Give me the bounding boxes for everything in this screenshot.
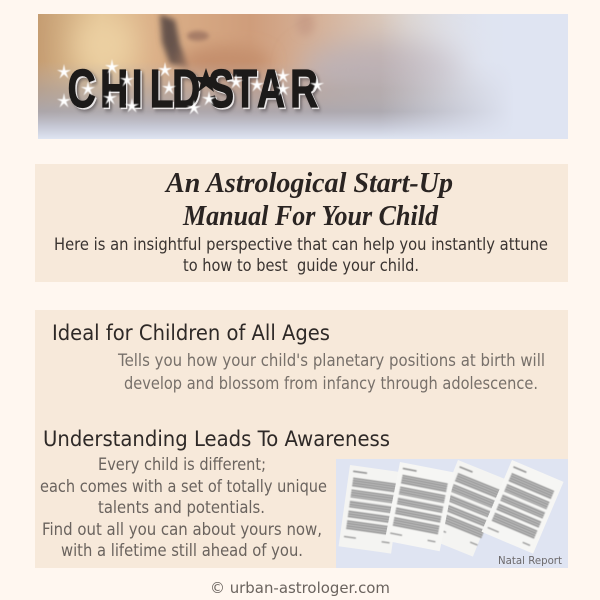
title: An Astrological Start-Up xyxy=(164,168,453,199)
logo wordmark: CHILDSTAR xyxy=(68,58,318,118)
text: planetary positions xyxy=(117,351,545,394)
heading: understanding: Understanding Leads To Awareness xyxy=(43,427,390,451)
banner image: Child Star logo xyxy=(38,12,568,139)
title: Manual For Your Child xyxy=(182,201,439,232)
intro text xyxy=(54,235,548,276)
panel: intro xyxy=(35,164,568,282)
text: every child is different: with a lifetime still ahead of you. xyxy=(61,541,303,560)
image: natal report pages xyxy=(336,459,568,568)
logo wordmark: CHILDSTAR xyxy=(69,59,320,120)
panel: details xyxy=(35,310,568,568)
title xyxy=(164,168,453,232)
text: planetary positions: develop and blossom from infancy through adolescence. xyxy=(124,374,538,394)
text: every child is different xyxy=(40,455,327,560)
intro text: to how to best guide your child. xyxy=(183,256,419,276)
logo sparkle stars xyxy=(57,59,324,114)
logo wordmark: CHILDSTAR xyxy=(71,61,321,121)
text: every child is different: each comes with a set of totally unique xyxy=(40,477,327,496)
footer copyright: © urban-astrologer.com xyxy=(210,579,390,597)
text: every child is different: Every child is different; xyxy=(98,455,266,474)
heading: ideal for children: Ideal for Children of All Ages xyxy=(52,321,330,345)
caption: natal report: Natal Report xyxy=(498,554,563,567)
text: every child is different: Find out all you can about yours now, xyxy=(42,520,322,539)
text: every child is different: talents and potentials. xyxy=(98,498,265,517)
text: planetary positions: Tells you how your child's planetary positions at birth will xyxy=(117,351,545,371)
